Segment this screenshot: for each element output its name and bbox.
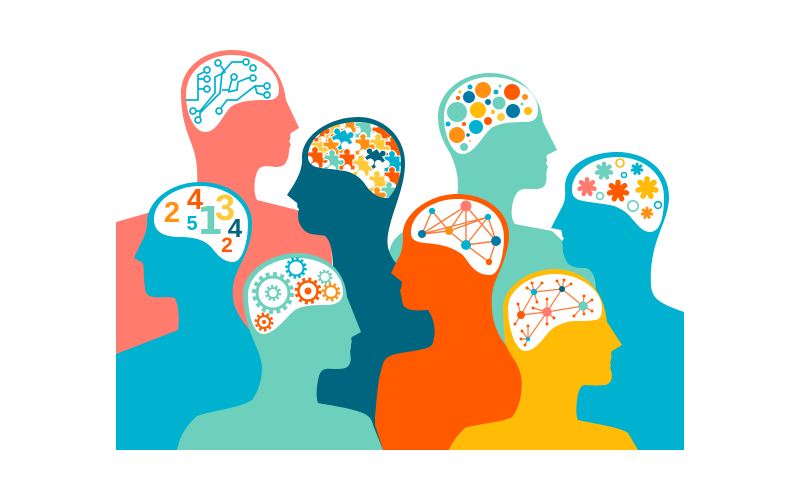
brain: gears <box>248 258 343 334</box>
brain: circuit <box>186 55 279 132</box>
head: yellow network person <box>449 269 638 450</box>
brain: starburst network <box>508 274 602 351</box>
head: teal dots person <box>388 73 600 360</box>
brain: numbers: 3 <box>215 187 235 228</box>
head: blue flowers person <box>551 152 684 450</box>
brain: numbers: 4 <box>187 184 203 216</box>
brain: numbers: 2 <box>221 234 233 257</box>
brain: network <box>411 199 504 275</box>
brain: numbers: 4 <box>228 213 243 243</box>
brain: coloured dots <box>444 77 538 154</box>
brain: flowers <box>572 157 664 232</box>
brain: numbers: 1 <box>197 199 223 243</box>
head: blue numbers person <box>116 182 262 450</box>
brain: puzzle <box>308 122 401 198</box>
brain: numbers: 5 <box>186 213 198 235</box>
brain: numbers <box>154 184 248 262</box>
head: dark blue puzzle person <box>287 112 440 450</box>
head: coral circuit person <box>116 50 332 354</box>
brain: numbers: 2 <box>164 197 180 229</box>
head: teal gears person <box>177 253 383 450</box>
head: orange network person <box>375 194 522 450</box>
